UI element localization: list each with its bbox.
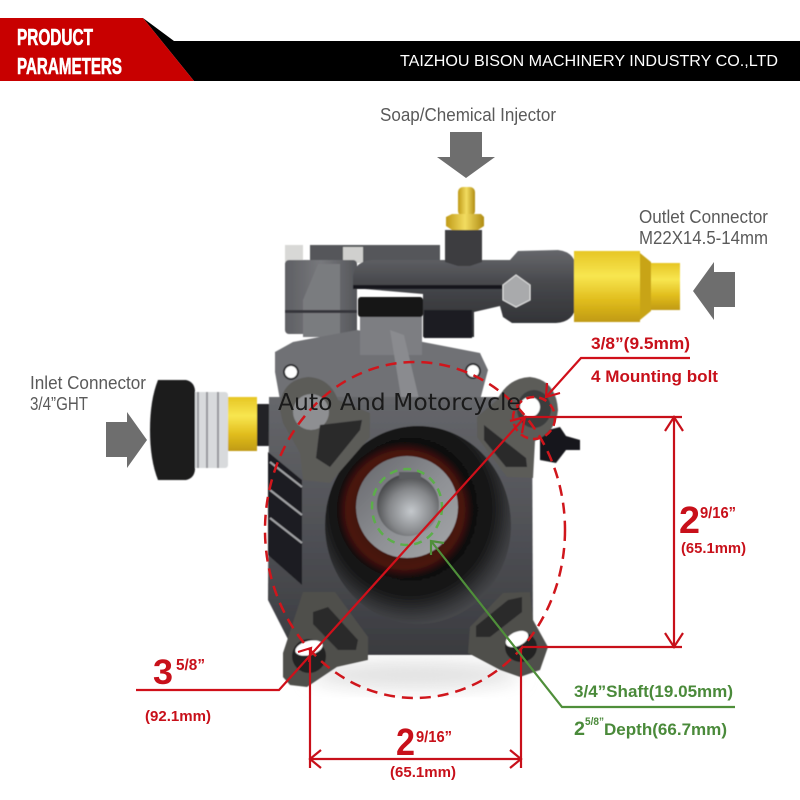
label: outlet connector: M22X14.5-14mm [639,228,768,248]
right drain nipple [540,427,580,463]
dimension label: 3 5/8: 3 [153,653,173,692]
dimension label: bottom 2 9/16: (65.1mm) [390,764,456,781]
title [17,24,122,79]
top right mounting hole [517,390,551,428]
dashed shaft circle [372,469,442,545]
dimension label: bottom 2 9/16: 2 [396,722,415,764]
header banner [0,18,800,81]
label: inlet connector: 3/4”GHT [30,394,88,414]
dome holes [284,364,480,379]
pump body [268,397,533,655]
dimension label: right 2 9/16 [679,500,746,557]
oil seal [337,442,473,578]
label: inlet connector: Inlet Connector [30,373,146,393]
title: PARAMETERS [17,53,122,79]
bypass lug [358,297,423,403]
company name: TAIZHOU BISON MACHINERY INDUSTRY CO.,LTD [400,53,778,70]
grey arrow: inlet [106,412,147,468]
shaft label: 3/4”Shaft(19.05mm) [574,682,733,701]
dashed mounting hole circle [513,397,555,439]
dashed bolt circle [265,362,565,698]
red diagonal dimension line [136,417,525,690]
label: outlet connector [639,207,768,248]
injector stem [445,230,482,266]
mounting flange top right [477,377,558,478]
label: outlet connector: Outlet Connector [639,207,768,227]
label: soap injector: Soap/Chemical Injector [380,105,556,125]
red vertical dimension [522,417,683,647]
mounting bolt label [591,334,718,386]
top left threaded hole [293,394,329,430]
mounting bolt label: 3/8”(9.5mm) [591,334,690,353]
mounting flange top left [280,377,370,483]
depth label: 5/8” [585,716,604,728]
dimension label: bottom 2 9/16 [390,722,456,781]
depth label [574,716,727,740]
mounting bolt label: 4 Mounting bolt [591,367,718,386]
upper dome [275,330,488,400]
bottom left hole [292,638,326,673]
grey arrow: outlet [693,262,735,320]
grey arrow: soap injector [437,132,495,178]
dimension label: right 2 9/16: 2 [679,500,700,542]
depth label: 2 [574,719,585,740]
red title tab [0,18,194,81]
mounting foot bottom right [468,592,548,677]
mounting foot bottom left [283,592,368,687]
dimension label: 3 5/8 [145,653,211,725]
crankcase bore [325,426,511,624]
soap injector brass barb [446,187,484,230]
dimension label: right 2 9/16: (65.1mm) [681,540,746,557]
label: inlet connector [30,373,146,414]
mounting bolt leader [546,358,690,397]
dimension label: 3 5/8: (92.1mm) [145,708,211,725]
depth label: Depth(66.7mm) [604,720,727,739]
title: PRODUCT [17,24,93,50]
dimension label: right 2 9/16: 9/16” [700,505,736,522]
shaft collar [356,456,458,558]
dimension label: bottom 2 9/16: 9/16” [416,729,452,746]
manifold [353,250,576,338]
foot slots [313,420,527,650]
outlet brass connector [574,251,680,322]
inlet connector [150,380,270,480]
green shaft leader [431,541,735,707]
cooling fins [268,452,302,585]
dimension label: 3 5/8: 5/8” [176,657,205,674]
shaft bore [377,472,439,536]
black company strip [143,18,800,81]
bottom right hole [503,628,537,662]
ground shadow [310,661,520,689]
outlet bolt [503,275,530,307]
upper pump head [285,245,440,337]
pump illustration [150,187,680,689]
red horizontal dimension [310,648,521,768]
watermark: Auto And Motorcycle [278,390,521,416]
